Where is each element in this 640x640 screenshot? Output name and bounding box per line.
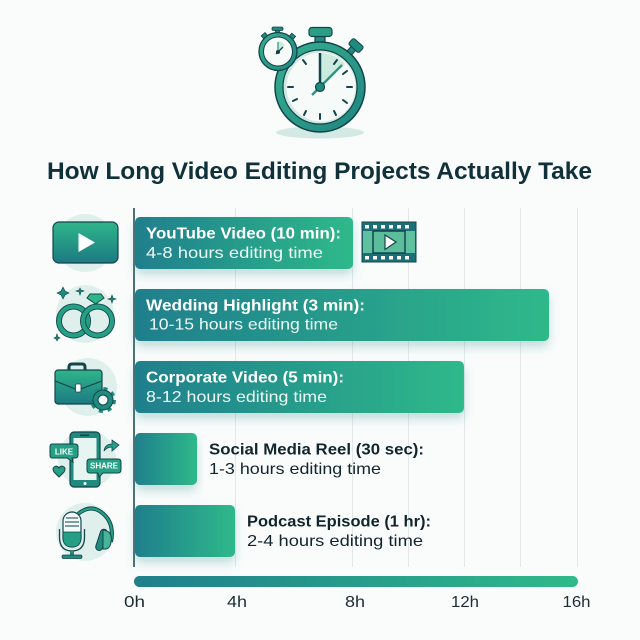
icon: social media phone: LIKE	[55, 448, 74, 456]
icon: social media phone: SHARE	[90, 462, 119, 470]
bar: Wedding Highlight	[135, 289, 549, 341]
axis labels: 16h	[562, 594, 590, 611]
axis labels	[124, 594, 590, 611]
axis labels: 8h	[345, 594, 365, 611]
icon: film strip	[362, 222, 416, 262]
bar: Podcast Episode	[135, 505, 431, 557]
icon: social media phone	[50, 430, 121, 488]
bar: Corporate Video: 8-12 hours editing time	[146, 389, 327, 406]
axis labels: 4h	[227, 594, 247, 611]
grid lines	[236, 208, 578, 567]
bar: YouTube Video: YouTube Video (10 min):	[146, 226, 341, 242]
bar: Social Media Reel	[135, 433, 424, 485]
bar: Wedding Highlight: 10-15 hours editing time	[149, 316, 338, 334]
bar: Corporate Video	[135, 361, 464, 413]
horizontal axis gradient bar	[134, 576, 578, 587]
icon: stopwatch illustration	[259, 27, 365, 138]
icon: YouTube play button	[53, 214, 118, 272]
bar: YouTube Video: 4-8 hours editing time	[146, 245, 323, 262]
bar: Podcast Episode: Podcast Episode (1 hr):	[247, 514, 431, 530]
bar: YouTube Video	[135, 217, 353, 269]
bar: Wedding Highlight: Wedding Highlight (3 min):	[146, 298, 365, 314]
title: How Long Video Editing Projects Actually Take	[47, 158, 592, 185]
bar: Corporate Video: Corporate Video (5 min):	[146, 370, 344, 386]
axis labels: 12h	[451, 594, 479, 611]
icon: wedding rings	[54, 285, 116, 343]
chart: vertical axis	[133, 208, 135, 567]
bar: Social Media Reel: 1-3 hours editing time	[209, 461, 381, 478]
bar: Podcast Episode: 2-4 hours editing time	[247, 533, 423, 550]
axis labels: 0h	[124, 594, 145, 611]
bar: Social Media Reel: Social Media Reel (30 sec):	[209, 442, 424, 458]
icon: microphone and headphones	[56, 503, 114, 561]
icon: briefcase and gear	[55, 358, 117, 416]
